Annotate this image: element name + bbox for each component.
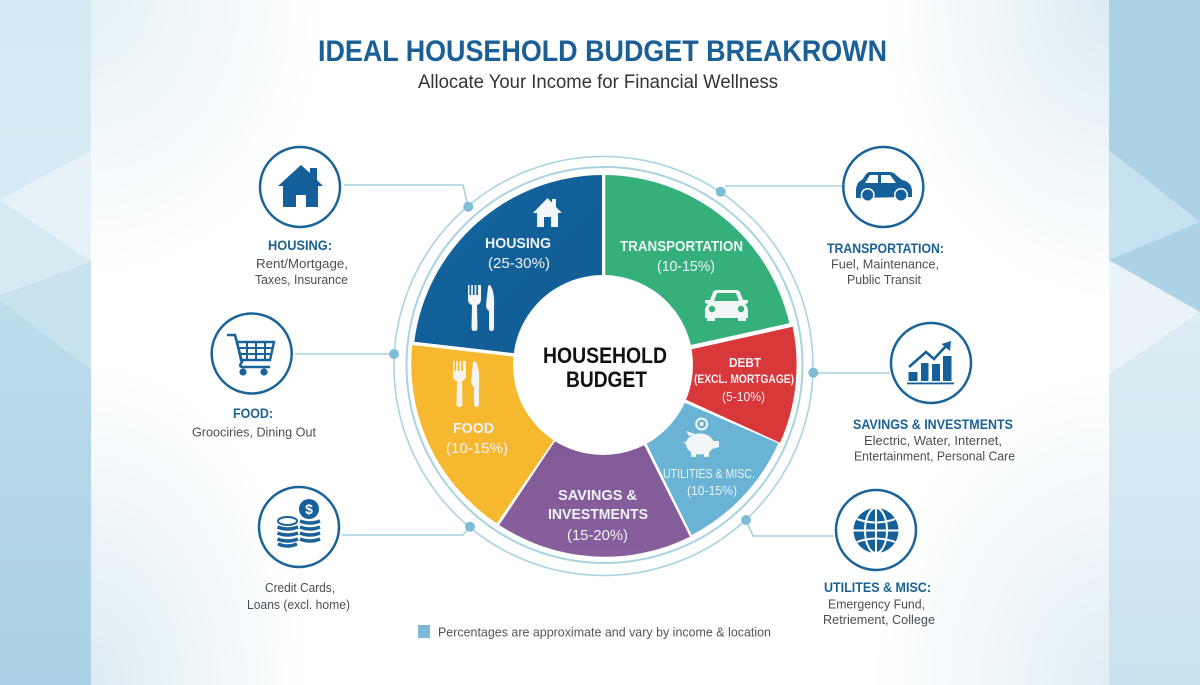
label: transportation: TRANSPORTATION [620,238,743,255]
text: savings [853,416,1015,464]
text: debt [247,580,350,612]
label: savings: (15-20%) [567,527,628,544]
label: debt: (5-10%) [722,389,765,404]
segment: savings [499,400,690,557]
icon: fork and knife in housing [468,285,494,331]
connector lines [295,185,890,536]
text: food [192,405,316,440]
text: transportation: TRANSPORTATION: [827,240,944,256]
center label [543,343,667,392]
outer rings [394,156,813,576]
label: debt: DEBT [729,355,761,370]
label: savings: INVESTMENTS [548,506,648,523]
text: savings: SAVINGS & INVESTMENTS [853,416,1013,432]
panel: transportation callout [827,147,944,287]
text: utilities [823,579,935,627]
icon: fork and knife in food [453,361,479,407]
center label: HOUSEHOLD [543,343,667,368]
text: food: Groociries, Dining Out [192,424,316,440]
panel: food callout [192,314,316,440]
text: transportation [827,240,944,287]
label: debt: (EXCL. MORTGAGE) [694,372,794,386]
label: savings: SAVINGS & [558,487,637,504]
icon: car [843,147,923,227]
label: savings [548,487,648,544]
segment: utilities [625,400,778,535]
text: utilities: Emergency Fund, [828,596,925,612]
text: savings: Electric, Water, Internet, [864,433,1002,448]
panel: utilities callout [823,490,935,627]
label: housing: HOUSING [485,235,551,252]
text: food: FOOD: [233,405,273,421]
text: housing: Rent/Mortgage, [256,256,348,271]
icon: small house [533,198,562,227]
icon: car in transportation [705,290,748,321]
panel: housing callout [255,147,348,287]
title: IDEAL HOUSEHOLD BUDGET BREAKROWN [318,35,887,68]
label: debt [694,355,794,404]
donut chart [411,175,797,557]
icon: coins: $ [305,501,313,517]
label: utilities: UTILITIES & MISC. [663,467,755,481]
label: food: FOOD [453,420,494,437]
label: food [446,420,508,457]
label: transportation [620,238,743,275]
center label: BUDGET [566,367,647,392]
footnote: Percentages are approximate and vary by income & location [438,624,771,640]
text: transportation: Public Transit [847,272,921,287]
text: housing [255,237,348,287]
label: housing [485,235,551,272]
connector dots [389,187,818,532]
subtitle: Allocate Your Income for Financial Wellness [418,72,778,93]
icon: globe [836,490,916,570]
text: housing: HOUSING: [268,237,332,253]
text: savings: Entertainment, Personal Care [854,448,1015,464]
label: transportation: (10-15%) [657,258,715,275]
icon: piggy bank [684,418,719,457]
segment: housing [414,175,602,365]
label: utilities: (10-15%) [687,483,737,498]
text: transportation: Fuel, Maintenance, [831,256,939,272]
text: housing: Taxes, Insurance [255,272,348,287]
segment: debt [640,327,797,443]
segment: transportation [605,175,789,365]
text: debt: Credit Cards, [265,580,335,595]
icon: house [260,147,340,227]
icon: growth chart [891,323,971,403]
panel: savings callout [853,323,1015,464]
segment: food [411,345,580,523]
center circle [513,275,693,455]
label: housing: (25-30%) [488,255,550,272]
icon: shopping cart [212,314,292,394]
text: utilities: Retriement, College [823,612,935,627]
text: debt: Loans (excl. home) [247,597,350,612]
label: utilities [663,467,755,498]
panel: debt callout [247,487,350,612]
text: utilities: UTILITES & MISC: [824,579,931,595]
label: food: (10-15%) [446,440,508,457]
